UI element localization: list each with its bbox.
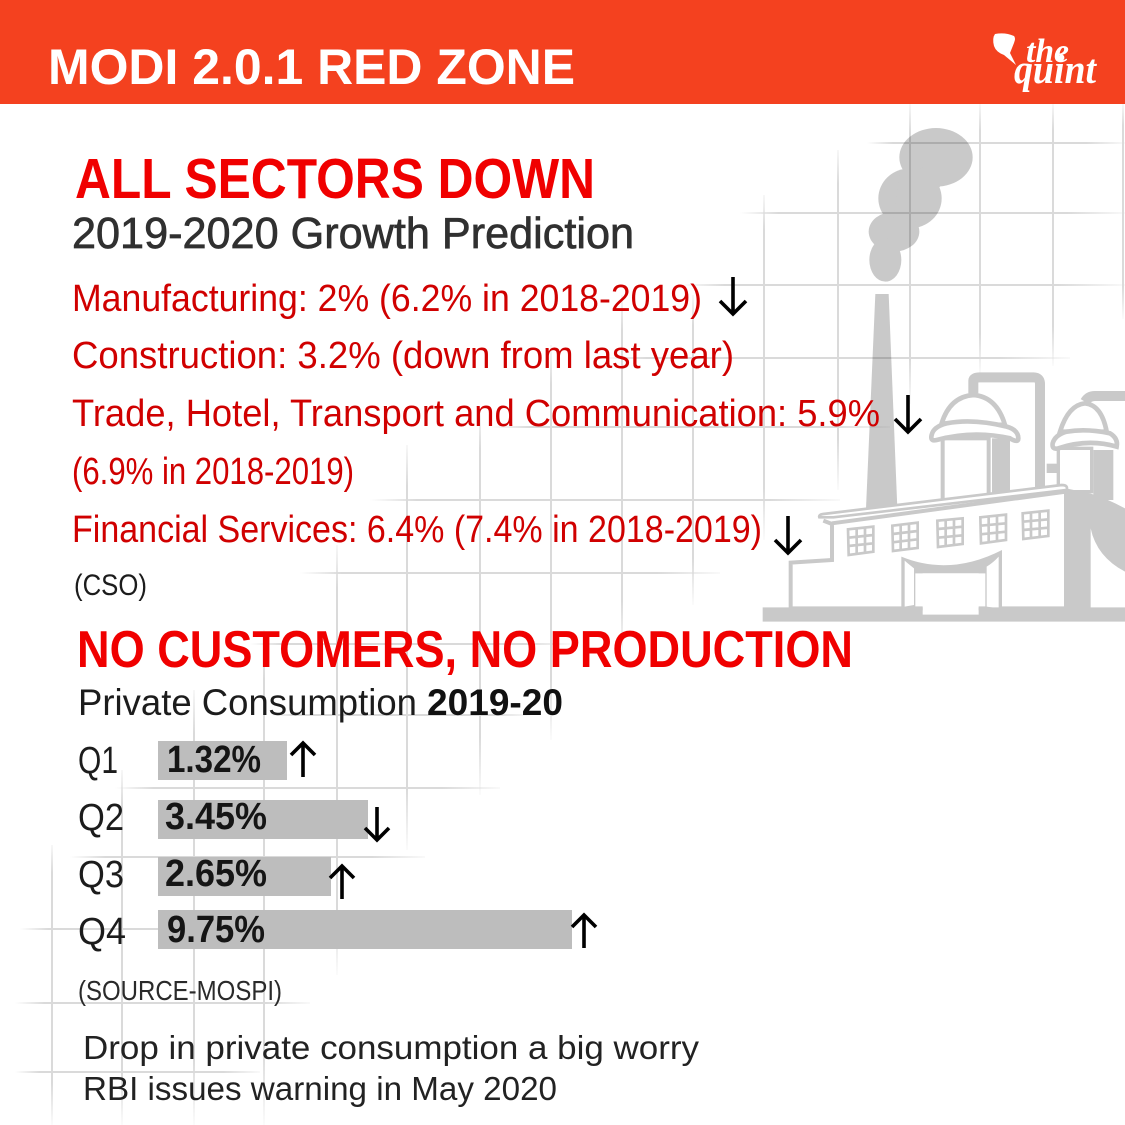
- factory windows: [848, 511, 1048, 555]
- callout: private consumption worry: [83, 1029, 700, 1107]
- subheading: private consumption: Private Consumption: [78, 682, 417, 723]
- callout: private consumption worry: RBI issues warning in May 2020: [83, 1070, 557, 1107]
- heading: all sectors down: ALL SECTORS DOWN: [75, 147, 595, 211]
- source: cso: (CSO): [74, 569, 147, 602]
- row: Q2: [78, 796, 389, 840]
- text: construction: Construction: 3.2% (down from last year): [72, 335, 734, 377]
- section: no customers no production: [77, 621, 853, 1107]
- section: all sectors down: [72, 147, 921, 602]
- bar chart: quarterly private consumption: [78, 739, 596, 953]
- icon: the quint logo: quint: [1014, 46, 1097, 92]
- row: Q3: 2.65%: [165, 853, 267, 895]
- title: MODI 2.0.1 RED ZONE: [48, 39, 575, 95]
- source: mospi: (SOURCE-MOSPI): [78, 975, 282, 1006]
- heading: no customers: NO CUSTOMERS, NO PRODUCTION: [77, 621, 853, 679]
- factory door: [901, 550, 1002, 608]
- row: Q4: 9.75%: [167, 909, 265, 951]
- arrow: manufacturing down: [720, 277, 746, 314]
- text: trade previous year: (6.9% in 2018-2019): [72, 451, 354, 493]
- icon: the quint logo: [993, 33, 1097, 92]
- row: Q4: [78, 909, 596, 953]
- icon: the quint logo: the: [1026, 33, 1069, 70]
- row: Q3: Q3: [78, 854, 124, 896]
- row: Q3: [78, 853, 354, 899]
- row: Q1: 1.32%: [167, 739, 261, 781]
- text: manufacturing: Manufacturing: 2% (6.2% in 2018-2019): [72, 278, 702, 320]
- row: Q4: Q4: [78, 911, 126, 953]
- factory base: [763, 607, 1125, 622]
- row: Q2: Q2: [78, 797, 124, 839]
- text: trade hotel transport communication: Trade, Hotel, Transport and Communication: 5.9%: [72, 393, 880, 435]
- subheading: growth prediction: 2019-2020 Growth Prediction: [72, 209, 634, 258]
- arrow: trade down: [895, 395, 921, 432]
- icon: factory illustration: [763, 128, 1125, 622]
- row: Q2: 3.45%: [165, 796, 267, 838]
- text: financial services: Financial Services: 6.4% (7.4% in 2018-2019): [72, 509, 762, 551]
- header banner: [0, 0, 1125, 104]
- row: Q1: [78, 739, 315, 782]
- subheading: private consumption: 2019-20: [427, 682, 563, 723]
- row: Q1: Q1: [78, 740, 118, 782]
- arrow: financial services down: [775, 516, 801, 553]
- callout: private consumption worry: Drop in private consumption a big worry: [83, 1029, 700, 1066]
